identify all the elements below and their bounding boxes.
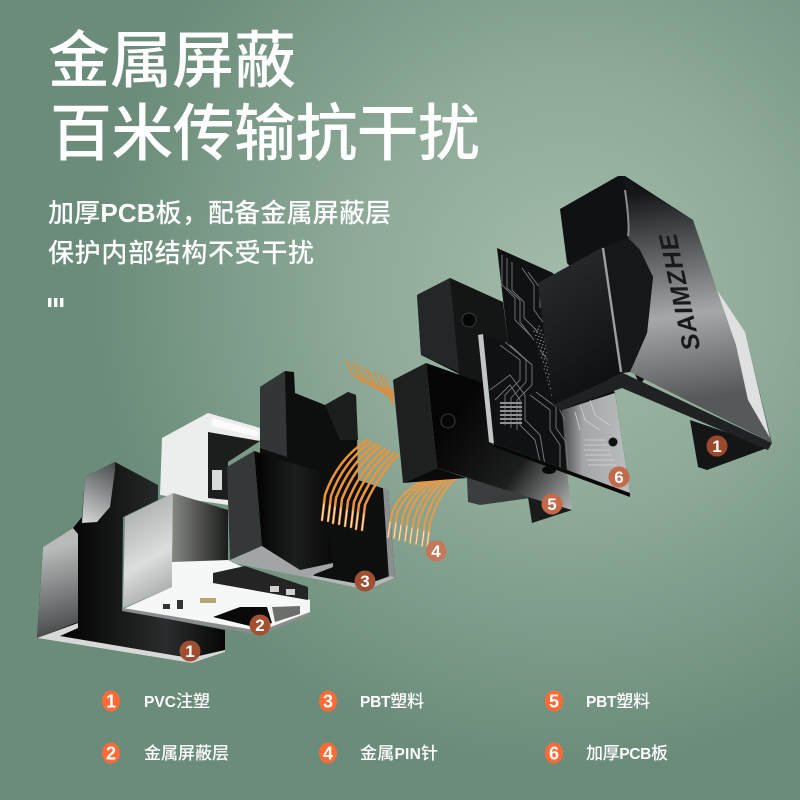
plastic block front (PBT) with label 5 xyxy=(393,363,572,523)
printed circuit board with label 6: 6 xyxy=(614,468,624,487)
title xyxy=(48,27,480,169)
decorative quote marks xyxy=(48,298,63,307)
legend: PBT plastic 3: PBT塑料 xyxy=(360,692,424,711)
legend: metal PIN: 金属PIN针 xyxy=(360,743,438,763)
legend: PBT plastic 5 xyxy=(545,690,650,712)
legend: PVC injection xyxy=(102,690,210,712)
upper small metal pins xyxy=(346,360,393,404)
description text xyxy=(48,198,391,268)
legend: metal PIN xyxy=(319,742,438,764)
legend: PVC injection: 1 xyxy=(106,692,116,712)
left PVC shell with label 1: 1 xyxy=(185,642,195,661)
legend: metal shield layer: 2 xyxy=(106,744,116,764)
upper part of metal shield xyxy=(160,413,260,505)
legend: thick PCB: 6 xyxy=(549,744,559,764)
description text: 保护内部结构不受干扰 xyxy=(48,238,314,268)
legend: PBT plastic 3 xyxy=(319,690,424,712)
PBT housing front part with label 3: 3 xyxy=(360,572,370,591)
legend: thick PCB xyxy=(545,742,668,764)
right PVC shell back part with label 1: 1 xyxy=(712,437,722,456)
legend: PVC injection: PVC注塑 xyxy=(144,692,210,711)
title: 金属屏蔽 xyxy=(48,27,296,96)
legend: PBT plastic 3: 3 xyxy=(323,692,333,712)
plastic block back (PBT) xyxy=(417,278,508,400)
right PVC shell front with logo xyxy=(538,176,772,450)
metal shield layer with label 2 xyxy=(122,493,310,636)
PBT housing back part xyxy=(260,371,395,590)
legend: metal shield layer: 金属屏蔽层 xyxy=(144,743,229,763)
legend: metal PIN: 4 xyxy=(323,744,333,764)
printed circuit board with label 6 xyxy=(478,248,630,497)
PBT housing front part with label 3 xyxy=(227,451,376,592)
legend: PBT plastic 5: PBT塑料 xyxy=(586,692,650,711)
legend: thick PCB: 加厚PCB板 xyxy=(586,744,668,763)
left PVC shell with label 1 xyxy=(37,462,225,663)
brand logo text: SAIMZHE xyxy=(654,230,706,353)
middle metal pins xyxy=(322,440,398,530)
legend: metal shield layer xyxy=(102,742,229,764)
lower metal pins with label 4: 4 xyxy=(431,542,441,561)
description text: 加厚PCB板，配备金属屏蔽层 xyxy=(48,198,391,228)
metal shield layer with label 2: 2 xyxy=(255,616,265,635)
legend: PBT plastic 5: 5 xyxy=(549,692,559,712)
plastic block front (PBT) with label 5: 5 xyxy=(547,495,557,514)
lower metal pins with label 4 xyxy=(388,478,457,562)
right PVC shell back part with label 1 xyxy=(690,420,770,470)
title: 百米传输抗干扰 xyxy=(50,100,480,169)
